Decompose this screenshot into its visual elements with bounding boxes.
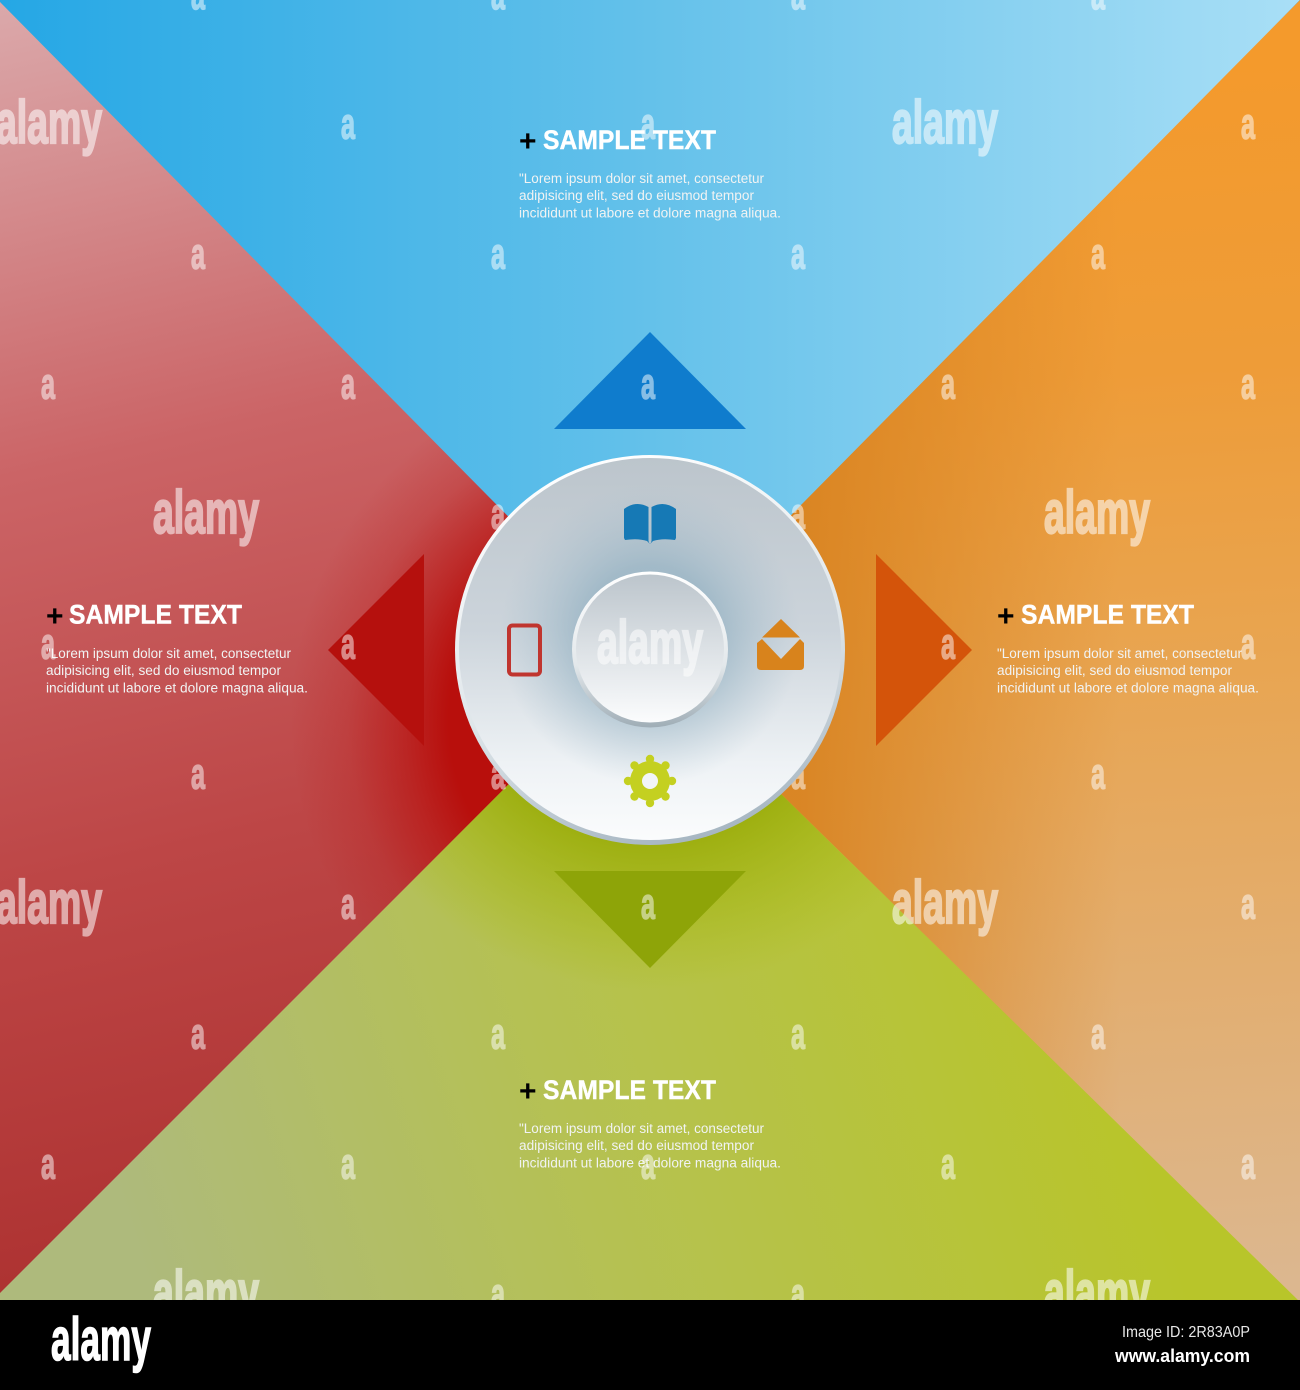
watermark grid: a [641, 360, 655, 408]
text block: left: adipisicing elit, sed do eiusmod tempor [46, 663, 282, 678]
watermark grid: alamy [892, 869, 998, 936]
central disc [455, 455, 845, 845]
text block: left [46, 600, 308, 696]
icon: book [624, 504, 676, 544]
watermark: hub logo: alamy [597, 609, 703, 676]
watermark grid: alamy [0, 89, 102, 156]
watermark grid: a [341, 880, 355, 928]
watermark grid: a [791, 750, 805, 798]
icon: gear [624, 755, 676, 807]
center hub button [572, 572, 728, 728]
text block: top: adipisicing elit, sed do eiusmod tempor [519, 188, 755, 203]
panel: right orange quadrant [600, 0, 1300, 1390]
text block: right: incididunt ut labore et dolore magna aliqua. [997, 680, 1259, 696]
watermark grid: a [791, 1010, 805, 1058]
text block: bottom: adipisicing elit, sed do eiusmod tempor [519, 1138, 755, 1153]
text block: bottom: SAMPLE TEXT [543, 1075, 716, 1105]
text block: left: SAMPLE TEXT [69, 600, 242, 630]
watermark grid: a [941, 1140, 955, 1188]
watermark grid: a [641, 100, 655, 148]
icon: tablet [509, 626, 540, 674]
text block: right: SAMPLE TEXT [1021, 600, 1194, 630]
text block: right: + [997, 600, 1015, 633]
watermark grid: a [491, 1270, 505, 1318]
watermark grid: a [1241, 100, 1255, 148]
watermark grid: a [1091, 230, 1105, 278]
watermark grid: a [191, 1010, 205, 1058]
arrow: right orange triangle [876, 554, 972, 746]
arrow: top blue triangle [554, 332, 746, 429]
watermark grid: a [191, 750, 205, 798]
text block: left: + [46, 600, 64, 633]
watermark grid: a [491, 1010, 505, 1058]
watermark grid: a [491, 230, 505, 278]
watermark grid: a [1241, 880, 1255, 928]
watermark grid: a [341, 620, 355, 668]
watermark grid: a [341, 360, 355, 408]
watermark grid: a [191, 230, 205, 278]
watermark grid: a [341, 100, 355, 148]
watermark grid: alamy [0, 869, 102, 936]
watermark grid: a [1091, 750, 1105, 798]
text block: bottom: "Lorem ipsum dolor sit amet, consectetur [519, 1121, 764, 1136]
watermark grid: a [791, 490, 805, 538]
watermark grid: alamy [1044, 479, 1150, 546]
watermark grid: alamy [1044, 1259, 1150, 1326]
text block: bottom: incididunt ut labore et dolore magna aliqua. [519, 1156, 781, 1170]
text block: top: "Lorem ipsum dolor sit amet, consectetur [519, 171, 764, 186]
watermark grid: a [41, 620, 55, 668]
footer bar [0, 1300, 1300, 1390]
panel: left red quadrant [0, 0, 700, 1300]
watermark grid: alamy [153, 1259, 259, 1326]
watermark grid: a [1241, 620, 1255, 668]
watermark grid: a [41, 360, 55, 408]
watermark grid: a [41, 1140, 55, 1188]
text block: top: SAMPLE TEXT [543, 125, 716, 155]
image id: Image ID: 2R83A0P [1122, 1324, 1250, 1341]
watermark grid: a [791, 230, 805, 278]
watermark grid: a [1241, 360, 1255, 408]
text block: right: adipisicing elit, sed do eiusmod tempor [997, 663, 1233, 678]
watermark grid: a [941, 360, 955, 408]
text block: top: incididunt ut labore et dolore magna aliqua. [519, 206, 781, 220]
panel: bottom green quadrant [0, 640, 1300, 1302]
watermark grid: alamy [153, 479, 259, 546]
watermark grid: alamy [892, 89, 998, 156]
arrow: bottom green triangle [554, 871, 746, 968]
watermark grid: a [491, 750, 505, 798]
watermark grid: a [1241, 1140, 1255, 1188]
watermark grid: a [791, 1270, 805, 1318]
panel: top blue quadrant [0, 0, 1300, 660]
icon: envelope [757, 619, 804, 670]
watermark grid: a [491, 490, 505, 538]
watermark grid: a [1091, 1010, 1105, 1058]
text block: top [519, 125, 781, 220]
text block: bottom [519, 1075, 781, 1170]
watermark grid: a [641, 1140, 655, 1188]
website: www.alamy.com [1114, 1346, 1250, 1366]
text block: right [997, 600, 1259, 696]
footer logo: alamy [51, 1306, 151, 1373]
watermark grid: a [341, 1140, 355, 1188]
watermark grid: a [641, 880, 655, 928]
text block: right: "Lorem ipsum dolor sit amet, consectetur [997, 646, 1242, 661]
text block: left: "Lorem ipsum dolor sit amet, consectetur [46, 646, 291, 661]
watermark grid: a [941, 620, 955, 668]
text block: bottom: + [519, 1075, 537, 1108]
arrow: left red triangle [328, 554, 424, 746]
text block: top: + [519, 125, 537, 158]
text block: left: incididunt ut labore et dolore magna aliqua. [46, 680, 308, 696]
